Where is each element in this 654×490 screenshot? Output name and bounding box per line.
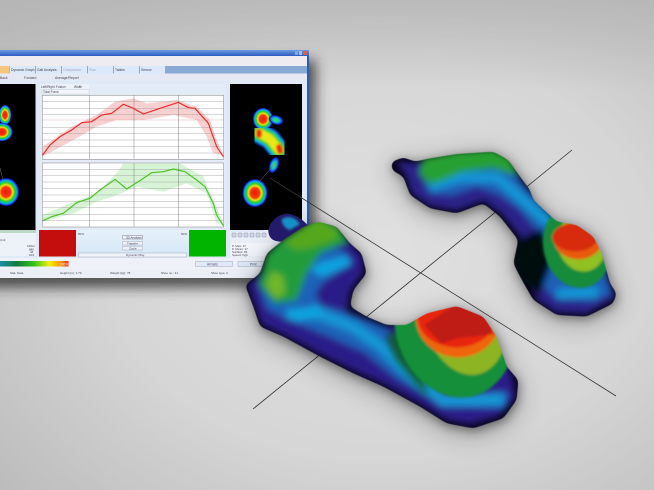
chart panel — [39, 84, 226, 230]
purple body — [395, 150, 615, 314]
sub header: Average/Report — [55, 76, 79, 80]
purple body — [248, 220, 515, 424]
balance controls: 50% — [181, 232, 187, 236]
left data table: 103 — [29, 253, 34, 257]
menu band — [0, 56, 307, 66]
sub header: Back — [0, 76, 8, 80]
balance controls: Cycle — [129, 246, 137, 250]
right pressure map — [230, 84, 302, 230]
right data controls: P. Max: 47 — [232, 244, 246, 248]
content background — [0, 80, 307, 260]
cyan spine — [430, 177, 598, 294]
bottom bar with scale: All Sets — [207, 262, 218, 266]
left data table: 880 — [29, 248, 34, 252]
chart tabs: Left/Right — [41, 85, 55, 89]
balance controls: 3D Analysis — [126, 236, 142, 240]
left data table — [0, 230, 36, 257]
green force chart — [42, 163, 224, 227]
foot shadows — [245, 154, 618, 434]
right data controls: Surface: 65 — [232, 250, 248, 254]
right data controls: P. Mean: 17 — [232, 247, 248, 251]
green balance square — [189, 230, 226, 256]
red force chart — [42, 95, 224, 159]
window shadow — [0, 60, 316, 288]
software window — [0, 50, 309, 278]
chart tabs: Fusion — [56, 85, 66, 89]
blue band — [423, 163, 612, 302]
small toe — [268, 214, 308, 242]
right data controls: Speed: high — [232, 253, 248, 257]
tab bar: Gait Analysis — [37, 68, 57, 72]
sub header — [0, 74, 307, 80]
chart tabs — [40, 84, 89, 94]
right data controls — [230, 232, 307, 261]
cyan spine — [287, 314, 503, 401]
green toes — [259, 217, 348, 303]
blue band — [260, 237, 508, 408]
red balance square — [39, 230, 76, 256]
left data table: Unit — [0, 238, 6, 242]
foot sole heat stack — [259, 132, 280, 151]
tab bar: Sensor — [141, 68, 153, 72]
heel dome — [382, 306, 508, 400]
dark shade — [513, 228, 557, 295]
tab bar: Dynamic Graph — [11, 68, 35, 72]
left pressure map — [0, 84, 36, 230]
status bar: Shoe type: A — [211, 271, 228, 275]
axis line 2 — [270, 178, 616, 396]
3D foot: small back — [392, 152, 616, 317]
balance controls: Transfer — [127, 242, 138, 246]
status bar: Stat. Data — [10, 271, 24, 275]
status bar: Weight (kg): 78 — [110, 271, 131, 275]
tab bar: Comparison — [63, 68, 81, 72]
sub header: Forward — [24, 76, 37, 80]
bottom bar with scale: 100% — [60, 262, 68, 266]
tab bar: Plan — [89, 68, 96, 72]
status bar: Shoe no.: 41 — [161, 271, 178, 275]
balance controls: Dynamic Play — [126, 253, 145, 257]
status bar — [0, 269, 309, 278]
bottom bar with scale — [0, 258, 307, 269]
axis line 1 — [253, 150, 572, 409]
bottom bar with scale: Print — [250, 262, 257, 266]
left data table: 100cc — [27, 244, 36, 248]
3D foot: large front — [246, 214, 518, 428]
chart tabs: Total Force — [43, 90, 59, 94]
chart tabs: Width — [74, 85, 82, 89]
tab bar: Tables — [115, 68, 125, 72]
tab bar — [0, 66, 307, 74]
status bar: Height (m): 1.70 — [60, 271, 82, 275]
balance controls — [77, 230, 189, 257]
title bar — [0, 50, 309, 56]
left data table: 44 — [30, 250, 34, 254]
green top — [419, 149, 518, 184]
balance controls: 50% — [78, 232, 84, 236]
heel dome — [541, 216, 607, 290]
cyan highlight — [311, 256, 351, 277]
